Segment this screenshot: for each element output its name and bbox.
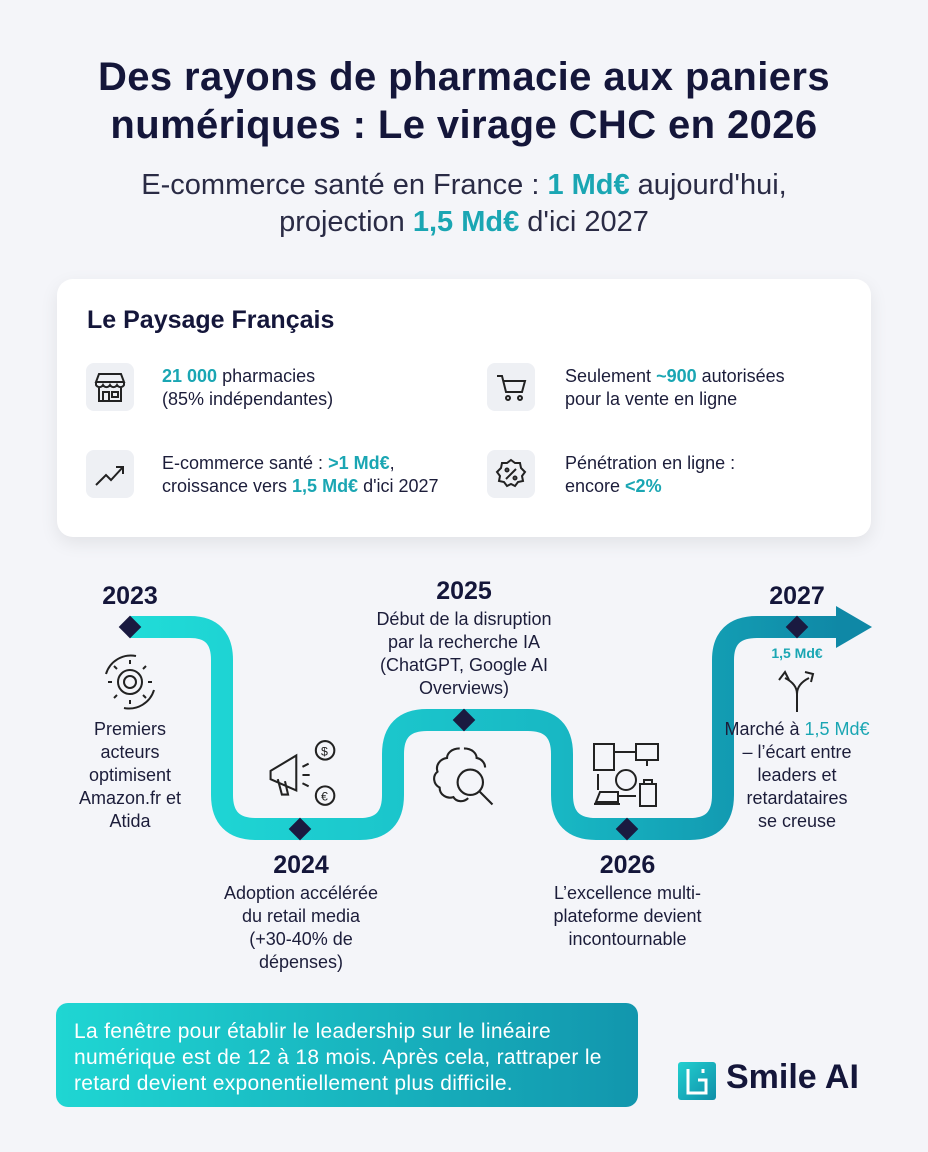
panel heading: Le Paysage Français: [87, 306, 334, 334]
milestone 2024: (+30-40% de: [249, 929, 353, 949]
title: [98, 55, 830, 147]
item: croissance: E-commerce santé : >1 Md€,: [162, 453, 395, 473]
item: autorisées: pour la vente en ligne: [565, 389, 737, 409]
milestone 2027: retardataires: [746, 788, 848, 808]
milestone 2024: du retail media: [242, 906, 360, 926]
icon: split arrow: [778, 670, 814, 712]
item: pharmacies: [86, 363, 333, 411]
item: croissance: [86, 450, 439, 498]
icon: percent badge: [487, 450, 535, 498]
milestone 2027: Marché à 1,5 Md€: [724, 719, 870, 739]
icon: multiplatform: [593, 743, 659, 807]
icon: trend: [86, 450, 134, 498]
title: Des rayons de pharmacie aux paniers: [98, 55, 830, 99]
callout: numérique est de 12 à 18 mois. Après cela, rattraper le: [74, 1046, 602, 1069]
icon: brain search: [433, 747, 494, 806]
milestone 2025: Overviews): [419, 678, 509, 698]
icon: cart: [487, 363, 535, 411]
milestone 2023: Amazon.fr et: [79, 788, 181, 808]
milestone 2025: [376, 577, 552, 698]
icon: megaphone: [270, 740, 336, 806]
item: pénétration: encore <2%: [565, 476, 662, 496]
milestone 2023: [79, 582, 181, 831]
panel: paysage: [57, 279, 871, 537]
milestone 2026: incontournable: [568, 929, 687, 949]
item: pénétration: [487, 450, 735, 498]
milestone 2027: – l’écart entre: [742, 742, 852, 762]
item: autorisées: Seulement ~900 autorisées: [565, 366, 785, 386]
title: numériques : Le virage CHC en 2026: [110, 103, 818, 147]
milestone 2026: L’excellence multi-: [554, 883, 701, 903]
item: pharmacies: (85% indépendantes): [162, 389, 333, 409]
milestone 2023: optimisent: [89, 765, 171, 785]
milestone 2026: [553, 851, 702, 949]
icon: megaphone: €: [321, 790, 328, 804]
milestone 2025: (ChatGPT, Google AI: [380, 655, 548, 675]
milestone 2024: Adoption accélérée: [224, 883, 378, 903]
milestone 2025: par la recherche IA: [388, 632, 540, 652]
milestone 2024: dépenses): [259, 952, 343, 972]
milestone 2025: 2025: [436, 577, 492, 605]
logo: [678, 1058, 859, 1100]
milestone 2023: 2023: [102, 582, 158, 610]
item: pharmacies: 21 000 pharmacies: [162, 366, 315, 386]
callout: La fenêtre pour établir le leadership sur le linéaire: [74, 1020, 551, 1043]
milestone 2027: leaders et: [757, 765, 837, 785]
item: pénétration: Pénétration en ligne :: [565, 453, 735, 473]
milestone 2027: 2027: [769, 582, 825, 610]
milestone 2027: 1,5 Md€: [771, 645, 823, 661]
callout: retard devient exponentiellement plus difficile.: [74, 1072, 513, 1095]
milestone 2027: [724, 582, 870, 831]
item: autorisées: [487, 363, 785, 411]
logo: Smile AI: [726, 1058, 859, 1096]
subtitle: E-commerce santé en France : 1 Md€ aujourd'hui,: [141, 169, 787, 201]
milestone 2024: [224, 851, 378, 972]
milestone 2023: acteurs: [100, 742, 160, 762]
milestone 2023: Premiers: [94, 719, 166, 739]
subtitle: projection 1,5 Md€ d'ici 2027: [279, 206, 649, 238]
milestone 2027: se creuse: [758, 811, 836, 831]
milestone 2026: 2026: [600, 851, 655, 879]
icon: gear cycle: [105, 654, 155, 710]
callout: [56, 1003, 638, 1107]
icon: megaphone: $: [321, 744, 328, 758]
milestone 2026: plateforme devient: [553, 906, 702, 926]
subtitle: [141, 169, 787, 238]
icon: logo mark: [678, 1062, 716, 1100]
milestone 2024: 2024: [273, 851, 329, 879]
item: croissance: croissance vers 1,5 Md€ d'ici 2027: [162, 476, 439, 496]
milestone 2025: Début de la disruption: [376, 609, 552, 629]
icon: store: [86, 363, 134, 411]
milestone 2023: Atida: [109, 811, 151, 831]
